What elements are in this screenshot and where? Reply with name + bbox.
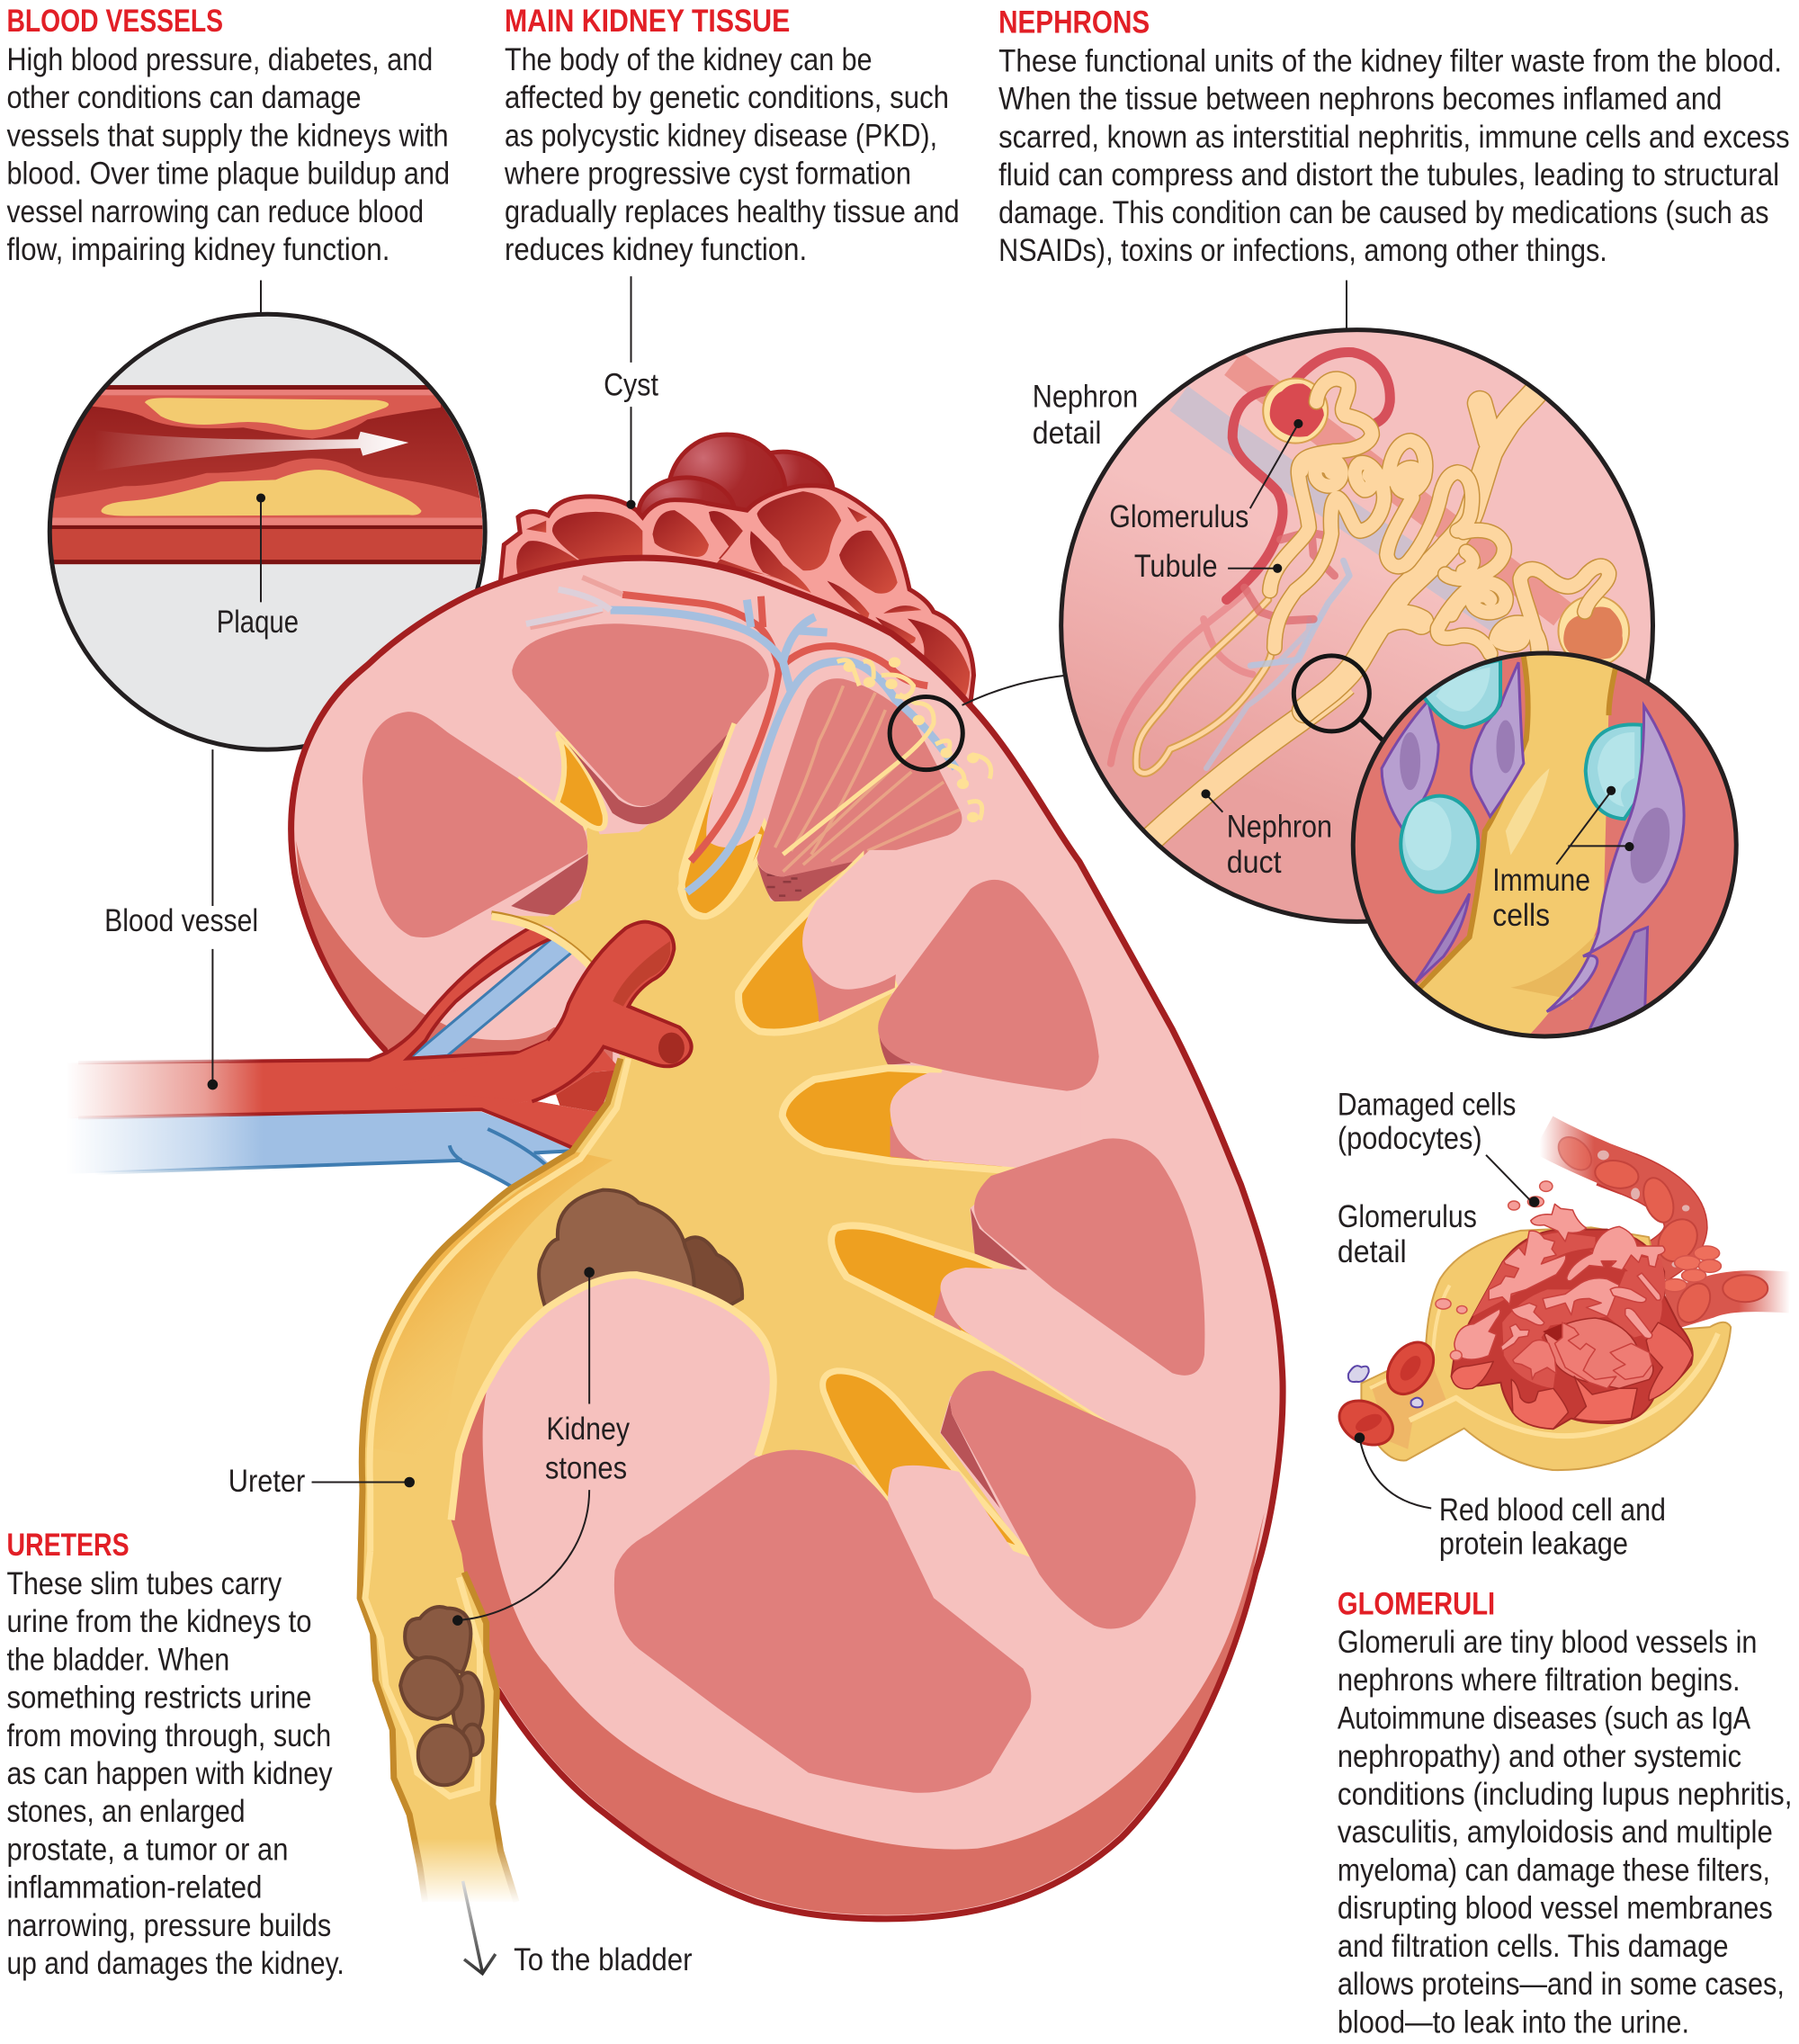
immune detail	[1382, 643, 1684, 1048]
hilum golden edge	[491, 912, 595, 966]
cup 3	[831, 1225, 1113, 1423]
label: duct: duct	[1227, 846, 1282, 880]
protein specks	[1598, 1151, 1689, 1268]
cyst tissue outline	[500, 486, 974, 710]
tube interior	[1371, 1359, 1446, 1449]
renal pelvis and ureter	[360, 723, 1112, 1902]
faded blue veins	[526, 589, 611, 623]
lobe 2	[890, 1072, 1080, 1168]
lower duct inner	[1144, 684, 1346, 846]
inner cysts	[516, 491, 970, 700]
label: glomerulus: Glomerulus	[1109, 500, 1249, 534]
afferent vessel	[1543, 1134, 1686, 1263]
lobe 1	[802, 850, 989, 990]
label: nephron detail: Nephron	[1033, 381, 1138, 415]
collecting duct outer	[1304, 393, 1535, 711]
body text: and filtration cells. This damage	[1338, 1930, 1729, 1964]
immune cell top	[1423, 660, 1500, 728]
label: immune: Immune	[1492, 864, 1590, 898]
body text: the bladder. When	[6, 1643, 229, 1677]
body text: something restricts urine	[6, 1681, 312, 1716]
stub body	[391, 922, 692, 1101]
ureter shading	[363, 1151, 613, 1460]
vein outline	[94, 1129, 572, 1189]
glomerulus dot	[1293, 419, 1302, 428]
heading: NEPHRONS	[998, 6, 1150, 40]
bottom lobe pale rim	[452, 1275, 774, 1520]
lower kidney stones	[400, 1607, 483, 1785]
purple cell lower	[1583, 928, 1648, 1043]
immune circle outline	[1353, 653, 1736, 1036]
vein upper branch	[409, 938, 574, 1059]
podocyte leader	[1486, 1155, 1535, 1205]
pyramid 6	[950, 1371, 1195, 1629]
cup 1	[738, 859, 895, 1032]
label: red blood cell: Red blood cell and	[1439, 1493, 1666, 1528]
label: detail: detail	[1033, 417, 1102, 451]
red cell leader	[1359, 1438, 1431, 1508]
calyx cup top left	[557, 734, 605, 829]
connector: nephrons text to circle	[1346, 281, 1347, 331]
cyst cluster	[500, 435, 974, 710]
podocyte dot	[1529, 1197, 1539, 1207]
tubule shadow	[1511, 932, 1598, 1000]
body text	[998, 44, 1790, 268]
heading: MAIN KIDNEY TISSUE	[505, 4, 790, 39]
text block: ureters	[6, 1529, 345, 1981]
artery outline	[78, 927, 574, 1149]
kidney stone upper	[539, 1190, 742, 1334]
pale rim branch	[681, 723, 759, 917]
body text: When the tissue between nephrons becomes inflamed and	[998, 83, 1722, 117]
free podocyte fragments	[1436, 1181, 1553, 1360]
body text: reduces kidney function.	[505, 233, 807, 267]
ureter pale inner wall	[365, 1059, 629, 1797]
panel: blood vessel detail circle	[46, 281, 487, 749]
cup 4	[823, 1371, 1025, 1552]
red arteries	[622, 595, 927, 861]
heading: BLOOD VESSELS	[6, 4, 223, 39]
label: nephron: Nephron	[1227, 811, 1332, 845]
immune cell left	[1401, 796, 1478, 892]
label: podocytes: (podocytes)	[1338, 1122, 1482, 1156]
vessels entering kidney	[67, 927, 616, 1189]
text block: glomeruli	[1338, 1587, 1793, 2040]
tubule walls	[1418, 643, 1622, 990]
pyramid 5	[974, 1138, 1204, 1376]
lobe patch between cups	[706, 682, 803, 847]
stub shading	[613, 941, 670, 1007]
pyramid dotted tip	[767, 875, 801, 896]
stub outline	[532, 922, 692, 1101]
panel: nephron detail circle	[1061, 281, 1653, 921]
branch arterioles	[1245, 533, 1335, 621]
artery stub in front of pelvis	[391, 922, 692, 1101]
leaked red cells	[1332, 1333, 1443, 1454]
stub opening	[658, 1033, 685, 1063]
nephron background	[1061, 330, 1653, 921]
body text: High blood pressure, diabetes, and	[6, 43, 433, 77]
striations	[775, 686, 960, 872]
label: kidney: Kidney	[546, 1412, 631, 1447]
text block: blood vessels	[6, 4, 450, 267]
convoluted tubule inner	[1270, 379, 1609, 659]
immune cell right	[1586, 724, 1642, 819]
tubule yellow	[1412, 643, 1624, 1048]
body text: blood—to leak into the urine.	[1338, 2005, 1689, 2040]
artery rear branch	[481, 1071, 616, 1152]
immune cell right highlight	[1598, 732, 1634, 807]
label: detail word: detail	[1338, 1235, 1407, 1269]
body text: prostate, a tumor or an	[6, 1833, 288, 1867]
lobe 3	[941, 1268, 1172, 1424]
immune circle background	[1353, 653, 1736, 1036]
body text: up and damages the kidney.	[6, 1947, 345, 1981]
body text: affected by genetic conditions, such	[505, 81, 949, 115]
magnifier connector	[1361, 720, 1385, 743]
kidney body silhouette	[291, 558, 1283, 1919]
narrowed artery with plaque	[46, 385, 487, 564]
cyst dot	[626, 500, 636, 509]
fragments and leaked cells	[1332, 1181, 1553, 1454]
label: protein leakage: protein leakage	[1439, 1528, 1628, 1562]
glomerulus leader	[1250, 424, 1298, 508]
left pyramid shadow	[511, 854, 588, 915]
body text: where progressive cyst formation	[504, 157, 911, 192]
calyx cup top centre	[682, 743, 769, 917]
connector: blood vessels text to circle	[260, 281, 262, 317]
pyramid left	[362, 712, 588, 937]
plaque dot	[256, 493, 265, 503]
thin loop inner	[1136, 600, 1272, 773]
labels on main kidney	[104, 749, 693, 1977]
body text: narrowing, pressure builds	[6, 1909, 331, 1943]
bottom lobe of cortex covering stone	[485, 1275, 835, 1669]
ureter outer wall	[360, 1059, 621, 1902]
dark lobe 2	[891, 1125, 929, 1161]
artery main	[67, 927, 616, 1118]
faded red arteries	[530, 578, 622, 627]
body text: nephrons where filtration begins.	[1338, 1663, 1741, 1698]
immune dots	[1607, 786, 1634, 851]
tuft base	[1451, 1230, 1693, 1429]
capsule upper	[1263, 379, 1328, 444]
heading: GLOMERULI	[1338, 1587, 1495, 1621]
body text: as polycystic kidney disease (PKD),	[505, 119, 937, 153]
body text	[1338, 1626, 1793, 2040]
body text: vessel narrowing can reduce blood	[6, 195, 424, 229]
glomerulus blob	[1270, 383, 1324, 437]
body text: stones, an enlarged	[6, 1795, 246, 1829]
tubule dot	[1273, 564, 1282, 573]
cup 2	[783, 1068, 1016, 1171]
bottom pyramid	[614, 1450, 1031, 1793]
body text: flow, impairing kidney function.	[6, 233, 389, 267]
stone dots	[452, 1267, 595, 1626]
connector: kidney to nephron circle	[962, 676, 1066, 705]
red cells in vessels	[1553, 1131, 1768, 1328]
duct dot	[1201, 789, 1211, 799]
salmon processes	[1513, 1322, 1652, 1388]
pyramid shadow striated	[757, 859, 859, 901]
pyramid 3	[878, 880, 1099, 1091]
ureter bottom fade	[391, 1838, 541, 1911]
mesangial patch	[1662, 1246, 1721, 1292]
nephron labels	[1033, 381, 1332, 880]
glomerular tuft	[1451, 1204, 1693, 1429]
circle outline	[49, 314, 485, 749]
purple cell lower left	[1415, 893, 1470, 982]
label: cells: cells	[1492, 899, 1550, 933]
dark lobe 1	[808, 960, 897, 1022]
capsule	[1361, 1227, 1731, 1470]
efferent vessel	[1669, 1291, 1790, 1309]
capsule lower	[1558, 596, 1629, 667]
immune leader	[1556, 792, 1629, 865]
blue capillaries	[1250, 560, 1349, 666]
purple cell left	[1382, 701, 1438, 829]
lobe 4	[888, 1466, 1039, 1589]
duct leader	[1206, 793, 1222, 812]
nephron circle outline	[1061, 330, 1653, 921]
dark lobe 3	[934, 1290, 962, 1331]
body text: urine from the kidneys to	[6, 1605, 312, 1639]
body text: from moving through, such	[6, 1719, 331, 1753]
label: plaque: Plaque	[217, 605, 299, 640]
magnifier small circle	[1293, 656, 1369, 731]
blue veins	[611, 600, 955, 892]
immune cell left highlight	[1405, 801, 1452, 871]
glomerulus vessels and capsule	[1361, 1131, 1790, 1470]
purple cell middle	[1472, 662, 1524, 817]
kidney magnifier circle	[890, 696, 962, 770]
text block: main kidney tissue	[504, 4, 960, 267]
body text: The body of the kidney can be	[505, 43, 873, 77]
tubule detail	[1227, 352, 1629, 711]
label: stones: stones	[545, 1452, 627, 1486]
lower arterioles fading	[1111, 590, 1253, 764]
grey circle background	[49, 314, 485, 749]
connector: blood vessel	[211, 749, 213, 1085]
lower blob	[1563, 606, 1623, 659]
panel: glomerulus detail	[1332, 1088, 1790, 1562]
tubule highlight	[1506, 768, 1550, 855]
label: cyst: Cyst	[604, 368, 658, 402]
convoluted tubule outer	[1270, 379, 1609, 659]
pyramid shadow top	[559, 723, 735, 824]
label: tubule: Tubule	[1134, 550, 1218, 584]
small blue vessels	[1206, 619, 1320, 768]
leaked proteins	[1348, 1366, 1423, 1407]
shadow 5	[971, 1208, 1030, 1272]
nephron squiggles	[783, 660, 991, 855]
shadow 6	[941, 1401, 1000, 1509]
artery lower limb	[481, 1100, 600, 1152]
body text: other conditions can damage	[6, 81, 362, 115]
body text: These slim tubes carry	[6, 1567, 282, 1601]
capsule pale rim left	[1370, 1286, 1450, 1388]
collecting duct inner	[1304, 393, 1535, 711]
body text	[6, 43, 450, 267]
body text: inflammation-related	[6, 1871, 262, 1905]
lower lobes	[1451, 1361, 1637, 1429]
shadow 3	[879, 1025, 911, 1065]
upper plaque	[145, 398, 389, 430]
tuft lobes	[1472, 1233, 1665, 1388]
left pyramid body	[362, 712, 587, 937]
nephron drawing	[1111, 352, 1629, 846]
label: damaged cells: Damaged cells	[1338, 1088, 1516, 1122]
right lobe	[1646, 1322, 1693, 1401]
body text: nephropathy) and other systemic	[1338, 1740, 1741, 1774]
kidney lower cortex band	[437, 1393, 1265, 1915]
pale edge to left cup	[517, 778, 586, 829]
afferent vessel wall	[1604, 1165, 1686, 1263]
striated pyramid	[757, 678, 962, 877]
tubule leader	[1228, 568, 1277, 569]
heading: URETERS	[6, 1529, 130, 1563]
body text: blood. Over time plaque buildup and	[6, 157, 450, 192]
label: ureter: Ureter	[228, 1465, 305, 1499]
background vessel bands	[1233, 363, 1562, 614]
panel: immune cells circle	[1353, 643, 1736, 1048]
pyramid top	[512, 623, 769, 806]
ureter dot	[404, 1477, 415, 1487]
body text	[504, 43, 960, 267]
arc arteriole	[1293, 352, 1390, 423]
immune cell top highlight	[1436, 668, 1490, 712]
lower duct outer	[1144, 684, 1346, 846]
body text	[6, 1567, 345, 1981]
capsule pale rim lower	[1410, 1333, 1718, 1436]
blood vessel dot	[208, 1080, 218, 1089]
label: glomerulus detail: Glomerulus	[1338, 1200, 1477, 1234]
plaque leader	[260, 498, 262, 602]
dark centre	[1543, 1322, 1565, 1343]
bottom centre lobe	[1544, 1318, 1653, 1388]
upper kidney detail: pyramids and vessels	[512, 578, 991, 917]
red cell dot	[1355, 1432, 1365, 1443]
purple cell right	[1547, 705, 1684, 1012]
body text: vessels that supply the kidneys with	[6, 119, 449, 153]
thin loop outer	[1136, 600, 1272, 773]
large cysts	[639, 435, 833, 551]
right side lobes, cups and pyramids	[614, 850, 1204, 1793]
label: to the bladder: To the bladder	[514, 1943, 693, 1977]
blood flow arrow	[106, 432, 408, 470]
connector: cyst leader lines	[631, 276, 632, 503]
body text: gradually replaces healthy tissue and	[505, 195, 960, 229]
vein	[67, 1112, 574, 1189]
body text: as can happen with kidney	[6, 1757, 333, 1791]
arrow to bladder	[463, 1881, 496, 1974]
red cell centres	[1353, 1352, 1425, 1435]
main arteriole	[1227, 390, 1283, 600]
podocytes	[1454, 1204, 1665, 1359]
stone leader	[456, 1272, 589, 1620]
text block: nephrons	[998, 6, 1790, 268]
body text: NSAIDs), toxins or infections, among other things.	[998, 234, 1607, 268]
hilum pale edge	[491, 917, 592, 969]
kidney upper left cortex band	[296, 841, 613, 1062]
ureter leader	[312, 1481, 409, 1483]
lower plaque	[101, 470, 422, 516]
label: blood vessel: Blood vessel	[104, 904, 258, 938]
